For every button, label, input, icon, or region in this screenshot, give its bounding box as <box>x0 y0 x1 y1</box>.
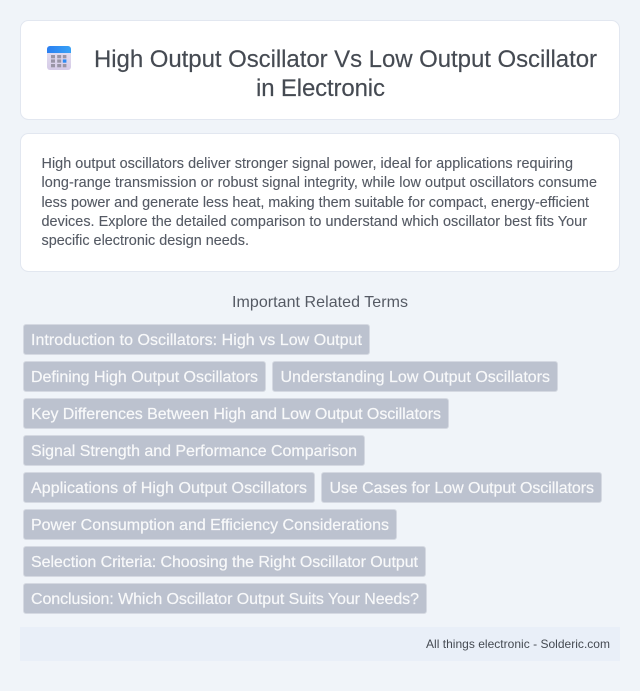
tag: key differences: Key Differences Between High and Low Output Oscillators <box>31 406 441 423</box>
icon: calendar grid <box>47 46 71 70</box>
text block: description: long-range transmission or robust signal integrity, while low output oscillators consume <box>42 175 597 191</box>
tag: key differences <box>24 398 448 428</box>
text block: description: less power and generate less heat, making them suitable for compact, energy-efficient <box>42 195 589 211</box>
tag: selection criteria <box>24 546 426 576</box>
text block: description: devices. Explore the detailed comparison to understand which oscillator best fits Your <box>42 214 587 230</box>
tag: power consumption <box>24 510 396 540</box>
tag: understanding low output: Understanding Low Output Oscillators <box>280 369 550 386</box>
tag: introduction: Introduction to Oscillators: High vs Low Output <box>31 332 363 349</box>
tag: use cases: Use Cases for Low Output Oscillators <box>330 480 594 497</box>
tag: selection criteria: Selection Criteria: Choosing the Right Oscillator Output <box>31 554 419 571</box>
tag: conclusion <box>24 584 426 614</box>
text block: description <box>42 156 597 249</box>
tag: understanding low output <box>272 362 558 392</box>
tag: conclusion: Conclusion: Which Oscillator Output Suits Your Needs? <box>31 591 419 608</box>
footer <box>20 627 620 661</box>
panel: title card <box>20 20 620 120</box>
tag: power consumption: Power Consumption and Efficiency Considerations <box>31 517 389 534</box>
text block: description: High output oscillators deliver stronger signal power, ideal for applications requiring <box>42 156 573 172</box>
tag: defining high output: Defining High Output Oscillators <box>31 369 258 386</box>
panel: description <box>20 134 620 272</box>
footer: All things electronic - Solderic.com <box>426 637 610 651</box>
tag: applications: Applications of High Output Oscillators <box>31 480 307 497</box>
tag: applications <box>24 472 314 502</box>
tag: introduction <box>24 324 370 354</box>
heading: title: High Output Oscillator Vs Low Output Oscillator <box>94 46 597 73</box>
heading: title: in Electronic <box>256 75 385 102</box>
tag: signal strength <box>24 436 364 466</box>
text block: description: specific electronic design needs. <box>42 233 249 249</box>
tag: defining high output <box>24 362 266 392</box>
heading: title <box>94 46 597 102</box>
tag: signal strength: Signal Strength and Performance Comparison <box>31 443 357 460</box>
tag: use cases <box>322 472 602 502</box>
heading: important related terms: Important Related Terms <box>232 294 408 311</box>
